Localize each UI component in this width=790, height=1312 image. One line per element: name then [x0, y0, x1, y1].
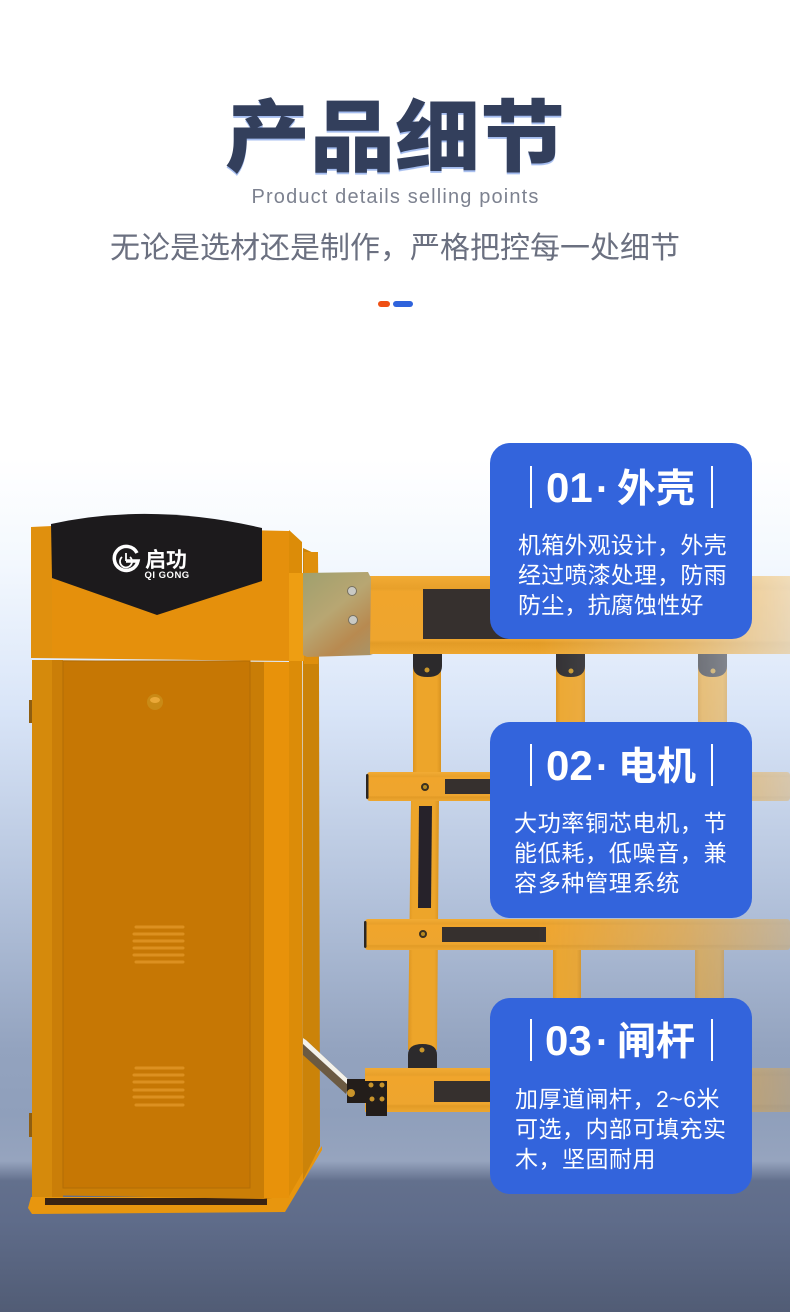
lower cabinet front [32, 660, 289, 1199]
logo: QI GONG [144, 570, 190, 581]
door lock [147, 694, 163, 710]
card 3: barrier arm: 闸杆 [617, 1021, 695, 1064]
mounting bracket [289, 572, 373, 661]
bottom rail [365, 1068, 790, 1112]
card 3: barrier arm: 可选，内部可填充实 [515, 1116, 726, 1142]
card 3: barrier arm: 加厚道闸杆，2~6米 [515, 1086, 720, 1112]
card 1: housing: · [596, 468, 609, 511]
card 2: motor: 容多种管理系统 [514, 870, 680, 896]
base gap [45, 1198, 267, 1205]
card 1: housing: 经过喷漆处理，防雨 [518, 562, 727, 588]
card 1: housing [490, 443, 752, 639]
tagline: 无论是选材还是制作，严格把控每一处细节 [110, 232, 680, 265]
fence uprights [408, 654, 727, 1070]
back side panel [303, 548, 320, 1180]
upper vent [134, 927, 183, 962]
gate cabinet [28, 514, 373, 1214]
card 3: barrier arm: 03 [545, 1017, 592, 1064]
top beam [370, 576, 790, 654]
title: 产品细节 [225, 95, 565, 182]
third rail [365, 919, 790, 950]
barrier fence [364, 576, 790, 1112]
upright hinges [408, 654, 727, 1068]
card 2: motor: 电机 [618, 746, 696, 789]
card 1: housing: 机箱外观设计，外壳 [518, 532, 727, 558]
second rail [367, 772, 790, 801]
card 3: barrier arm: 木，坚固耐用 [515, 1146, 656, 1172]
lower vent [134, 1068, 183, 1105]
drive arm [303, 1038, 387, 1116]
top housing [31, 526, 289, 661]
card 2: motor: 02 [546, 742, 593, 789]
card 1: housing: 外壳 [617, 468, 695, 511]
accent pills [378, 301, 413, 307]
black logo shield [51, 514, 262, 615]
rail end caps [364, 774, 368, 948]
subtitle: english: Product details selling points [252, 186, 539, 208]
card 2: motor: · [596, 746, 609, 789]
rail bolts [420, 784, 428, 937]
card 1: housing: 防尘，抗腐蚀性好 [518, 592, 704, 618]
card 2: motor: 大功率铜芯电机，节 [514, 810, 727, 836]
logo: 启功 [145, 549, 187, 572]
logo [114, 546, 190, 581]
reflective strips [418, 589, 546, 1102]
card 2: motor [490, 722, 752, 918]
cabinet door [63, 661, 250, 1188]
side panel [289, 530, 303, 1196]
card 2: motor: 能低耗，低噪音，兼 [514, 840, 727, 866]
card 3: barrier arm [490, 998, 752, 1194]
lower left hinges [29, 700, 32, 1137]
base plate [28, 1146, 322, 1214]
card 3: barrier arm: · [596, 1021, 609, 1064]
card 1: housing: 01 [546, 464, 593, 511]
